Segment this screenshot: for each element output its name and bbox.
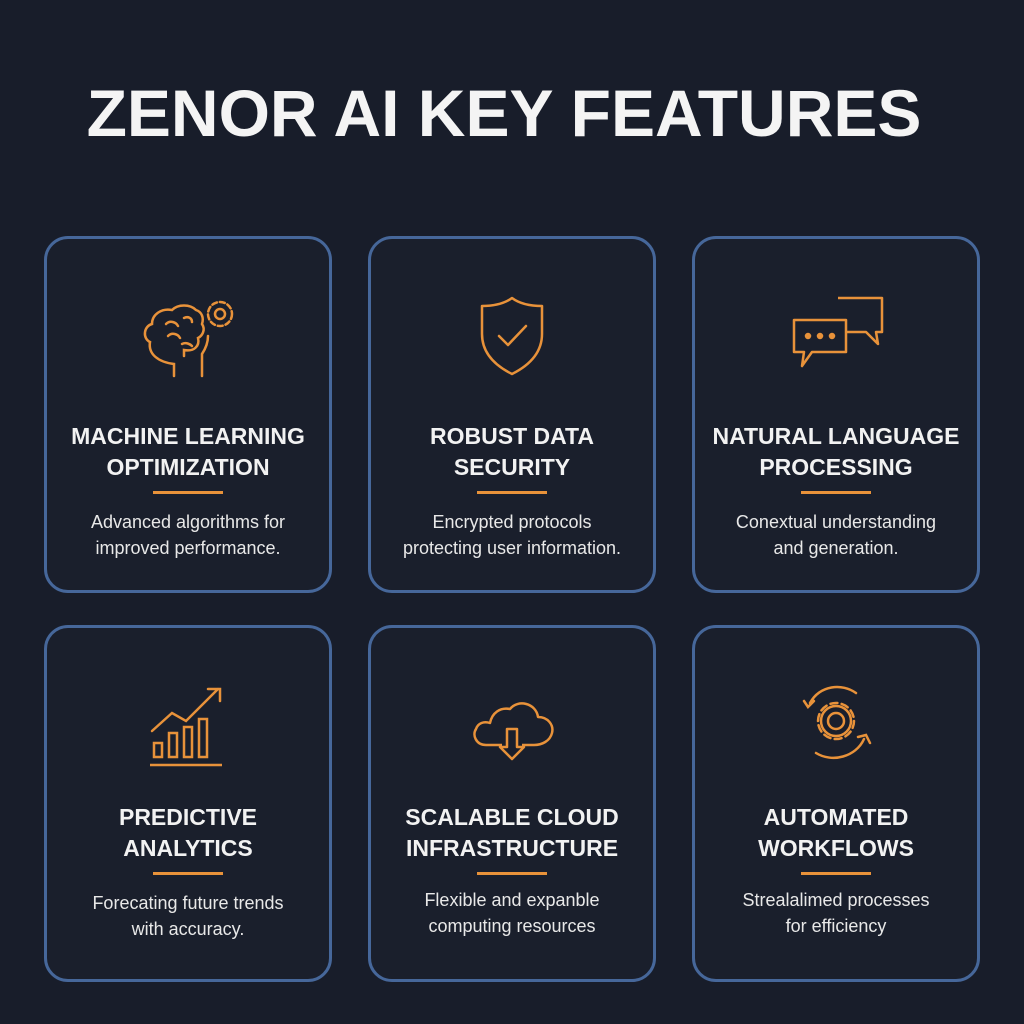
icon: cloud download <box>473 702 554 760</box>
heading <box>758 804 914 861</box>
description <box>424 890 600 936</box>
description: and generation. <box>773 538 899 558</box>
panel: data security <box>368 236 656 593</box>
description: protecting user information. <box>403 538 621 558</box>
description <box>91 512 285 558</box>
icon: brain gear <box>144 300 234 378</box>
description: Encrypted protocols <box>432 512 592 532</box>
heading <box>430 423 594 480</box>
panel: cloud <box>368 625 656 982</box>
heading <box>71 423 305 480</box>
icon: bar chart <box>150 688 222 766</box>
title: ZENOR AI KEY FEATURES <box>87 76 921 150</box>
heading: AUTOMATED <box>764 804 908 830</box>
panel: automated workflows <box>692 625 980 982</box>
panel: NLP <box>692 236 980 593</box>
heading: INFRASTRUCTURE <box>406 835 618 861</box>
description <box>403 512 621 558</box>
description: Advanced algorithms for <box>91 512 285 532</box>
heading: NATURAL LANGUAGE <box>712 423 960 449</box>
description <box>736 512 936 558</box>
heading: ROBUST DATA <box>430 423 594 449</box>
heading: ANALYTICS <box>123 835 253 861</box>
heading <box>405 804 619 861</box>
heading: WORKFLOWS <box>758 835 914 861</box>
panel: machine learning <box>44 236 332 593</box>
description: Forecating future trends <box>92 893 284 913</box>
icon: gear with cycle arrows <box>802 686 872 760</box>
description: Flexible and expanble <box>424 890 600 910</box>
description: computing resources <box>428 916 596 936</box>
description: improved performance. <box>95 538 281 558</box>
description <box>92 893 284 939</box>
description <box>742 890 930 936</box>
description: Strealalimed processes <box>742 890 930 910</box>
heading <box>119 804 257 861</box>
icon: shield <box>480 296 544 376</box>
description: Conextual understanding <box>736 512 936 532</box>
heading: SECURITY <box>454 454 570 480</box>
icon: chat bubbles <box>792 296 884 368</box>
description: with accuracy. <box>132 919 244 939</box>
heading: PROCESSING <box>759 454 913 480</box>
heading <box>712 423 960 480</box>
panel: predictive analytics <box>44 625 332 982</box>
heading: SCALABLE CLOUD <box>405 804 619 830</box>
heading: OPTIMIZATION <box>106 454 270 480</box>
heading: MACHINE LEARNING <box>71 423 305 449</box>
description: for efficiency <box>786 916 886 936</box>
heading: PREDICTIVE <box>119 804 257 830</box>
